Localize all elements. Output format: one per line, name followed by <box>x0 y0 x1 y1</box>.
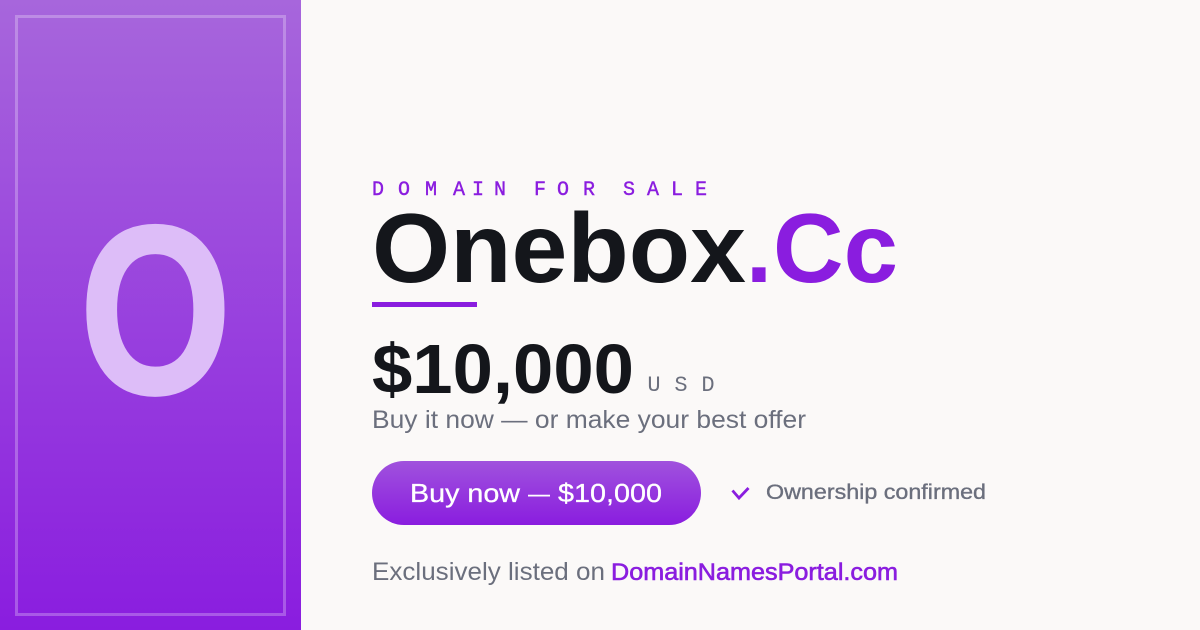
listing line: Exclusively listed on <box>372 558 605 586</box>
panel: left monogram <box>0 0 301 630</box>
price: $10,000 <box>372 330 634 408</box>
button label: — <box>528 478 550 508</box>
ownership note: Ownership confirmed <box>766 481 986 504</box>
buy button <box>372 461 701 525</box>
domain stem: Onebox <box>372 193 746 303</box>
button label <box>410 478 662 508</box>
currency: USD <box>647 373 715 398</box>
monogram letter: O <box>80 176 232 444</box>
title underline <box>372 302 477 307</box>
title: domain name <box>372 193 898 303</box>
eyebrow label: DOMAIN FOR SALE <box>372 179 707 202</box>
button label: Buy now <box>410 478 520 508</box>
panel inner frame <box>16 16 284 614</box>
domain extension: Cc <box>773 193 898 303</box>
domain dot: . <box>746 193 772 303</box>
offer text: Buy it now — or make your best offer <box>372 406 806 434</box>
icon: check mark <box>732 488 748 498</box>
button label: $10,000 <box>558 478 662 508</box>
listing link: DomainNamesPortal.com <box>611 559 898 586</box>
